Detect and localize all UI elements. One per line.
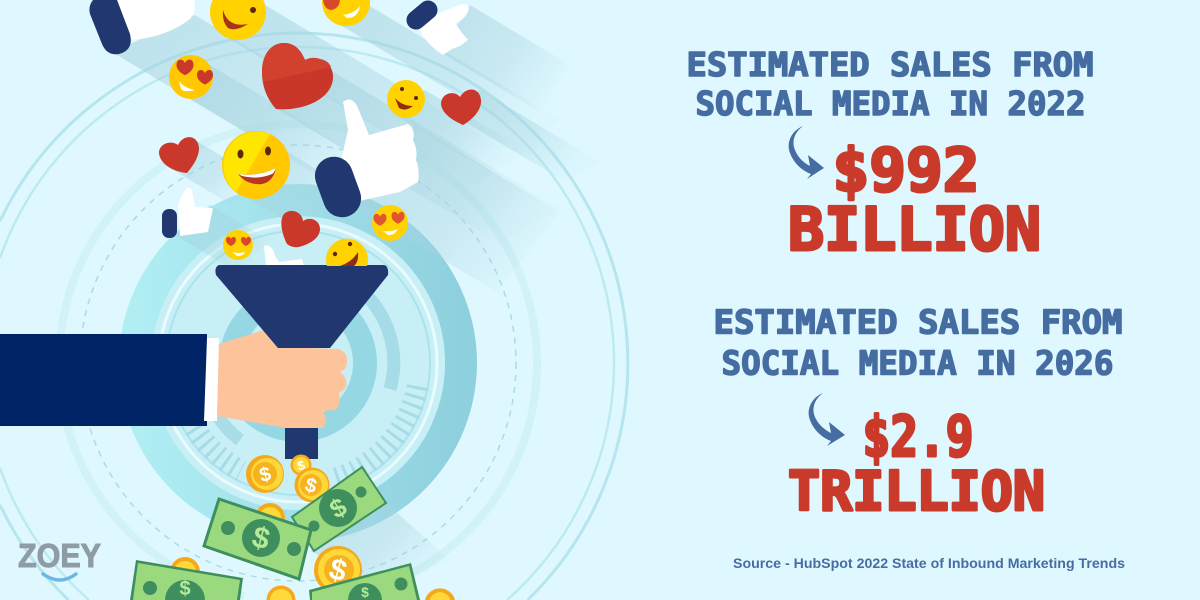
heading: 2022: ESTIMATED SALES FROM [686, 45, 1094, 84]
concentric rings [0, 33, 628, 600]
emoji: top right [322, 0, 370, 26]
arm with sleeve [0, 334, 219, 426]
heart: left [159, 137, 199, 173]
thumbs up: top left [89, 0, 195, 54]
bank note: lower right: $ [361, 584, 369, 600]
long shadows [112, 5, 600, 590]
bank note: right: $ [324, 491, 352, 525]
coin: lower right [314, 546, 362, 594]
bank note: centre: $ [249, 520, 274, 557]
figure: $2.9 trillion: TRILLION [788, 460, 1045, 523]
heading: 2026: SOCIAL MEDIA IN 2026 [722, 344, 1114, 382]
figure: $2.9 trillion [788, 405, 1045, 523]
emoji: main smiley [222, 131, 290, 199]
coin: small: $ [296, 457, 307, 474]
arrow: to $992 [789, 126, 824, 179]
coin: small [290, 454, 312, 476]
heart: right [441, 89, 481, 125]
coin: bottom right [425, 588, 455, 600]
heading: 2022 [686, 45, 1094, 123]
figure: $2.9 trillion: $2.9 [862, 405, 974, 470]
bank note: centre [204, 499, 311, 579]
funnel [215, 265, 388, 459]
coin: right: $ [303, 474, 319, 498]
thumbs up: large [310, 100, 419, 223]
heading: 2026: ESTIMATED SALES FROM [714, 302, 1122, 342]
source note: Source - HubSpot 2022 State of Inbound Marketing Trends [733, 555, 1125, 571]
emoji: right small [387, 80, 425, 118]
small thumb behind funnel [264, 245, 304, 266]
emoji: behind funnel [326, 239, 368, 266]
figure: $992 billion [788, 136, 1041, 265]
coin: lower left [170, 557, 200, 587]
emoji: heart eyes left [169, 55, 213, 99]
thumbs up: small [162, 188, 213, 238]
coin: lower right: $ [326, 552, 351, 589]
arrow: to $2.9 [809, 393, 845, 446]
heart: lower [281, 211, 320, 247]
bank note: lower left: $ [179, 578, 191, 600]
emoji: top centre [210, 0, 266, 40]
logo: Zoey: ZOEY [18, 537, 101, 574]
coin: left [246, 455, 284, 493]
heart: large [262, 43, 333, 109]
coin: behind bills [255, 503, 285, 533]
emoji: heart eyes right [372, 205, 408, 241]
bank note: lower right [309, 563, 420, 600]
figure: $992 billion: BILLION [788, 195, 1041, 265]
emoji: heart eyes small [223, 230, 253, 260]
coin: right [294, 468, 330, 502]
figure: $992 billion: $992 [832, 136, 980, 206]
thumbs up: top right [416, 4, 469, 55]
bank note: right [292, 467, 386, 551]
heading: 2026 [714, 302, 1122, 382]
coin: left: $ [257, 463, 273, 487]
bank note: lower left [130, 560, 243, 600]
heading: 2022: SOCIAL MEDIA IN 2022 [696, 84, 1086, 123]
hand [217, 330, 347, 428]
coin: bottom middle [266, 586, 296, 600]
